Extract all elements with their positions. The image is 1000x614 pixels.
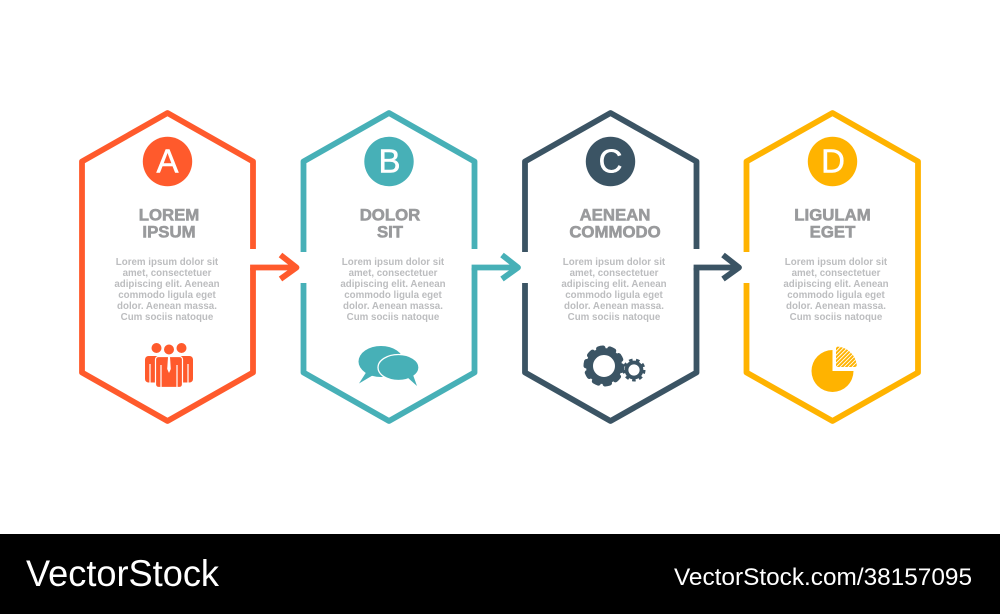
panel: D ligulam eget — [746, 113, 918, 421]
body text B: Cum sociis natoque — [347, 312, 440, 323]
body text C: amet, consectetuer — [570, 268, 659, 279]
heading B: SIT — [377, 222, 404, 242]
body text A: adipiscing elit. Aenean — [114, 279, 220, 290]
body text C: Lorem ipsum dolor sit — [563, 257, 666, 268]
body text D: adipiscing elit. Aenean — [783, 279, 889, 290]
badge B — [364, 137, 414, 186]
badge B: B — [378, 142, 401, 180]
body text C: Cum sociis natoque — [568, 312, 661, 323]
body text A: commodo ligula eget — [118, 290, 217, 301]
badge A — [143, 137, 192, 186]
heading C: COMMODO — [569, 222, 661, 242]
body text A: Lorem ipsum dolor sit — [116, 257, 219, 268]
badge C: C — [599, 142, 622, 180]
body text B: Lorem ipsum dolor sit — [342, 257, 445, 268]
body text B: dolor. Aenean massa. — [343, 301, 443, 312]
footer url: VectorStock.com/38157095 — [674, 564, 972, 591]
arrow B to C — [472, 255, 518, 279]
icon: pie chart — [812, 346, 857, 392]
heading B: DOLOR — [360, 206, 420, 224]
badge C — [586, 137, 635, 186]
body text C: commodo ligula eget — [565, 290, 664, 301]
panel: B dolor sit — [304, 113, 518, 421]
heading A: LOREM — [139, 206, 199, 224]
panel: A lorem ipsum — [82, 113, 296, 421]
hexagon outline A — [82, 113, 253, 421]
arrow A to B — [250, 255, 296, 279]
body text C: dolor. Aenean massa. — [564, 301, 664, 312]
hexagon outline C — [525, 113, 696, 421]
badge D: D — [821, 142, 845, 180]
body text D: commodo ligula eget — [787, 290, 886, 301]
body text D: dolor. Aenean massa. — [786, 301, 886, 312]
icon: speech bubbles — [358, 346, 419, 386]
body text B: commodo ligula eget — [344, 290, 443, 301]
hexagon outline D — [746, 113, 918, 421]
heading A: IPSUM — [142, 222, 196, 242]
body text D: amet, consectetuer — [792, 268, 881, 279]
body text A: Cum sociis natoque — [121, 312, 214, 323]
heading C: AENEAN — [580, 206, 650, 224]
arrow C to D — [694, 255, 739, 279]
footer logo: VectorStock — [26, 553, 219, 594]
body text A: dolor. Aenean massa. — [117, 301, 217, 312]
body text D: Cum sociis natoque — [790, 312, 883, 323]
body text B: adipiscing elit. Aenean — [340, 279, 446, 290]
body text C: adipiscing elit. Aenean — [561, 279, 667, 290]
body text D: Lorem ipsum dolor sit — [785, 257, 888, 268]
hexagon outline B — [304, 113, 474, 421]
heading D: LIGULAM — [794, 206, 871, 224]
heading D: EGET — [810, 222, 856, 242]
badge D — [808, 137, 857, 186]
icon: gears — [586, 348, 644, 384]
badge A: A — [156, 142, 179, 180]
icon: people — [145, 343, 193, 388]
body text A: amet, consectetuer — [123, 268, 212, 279]
panel: C aenean commodo — [525, 113, 739, 421]
body text B: amet, consectetuer — [349, 268, 438, 279]
footer bar — [0, 534, 1000, 614]
